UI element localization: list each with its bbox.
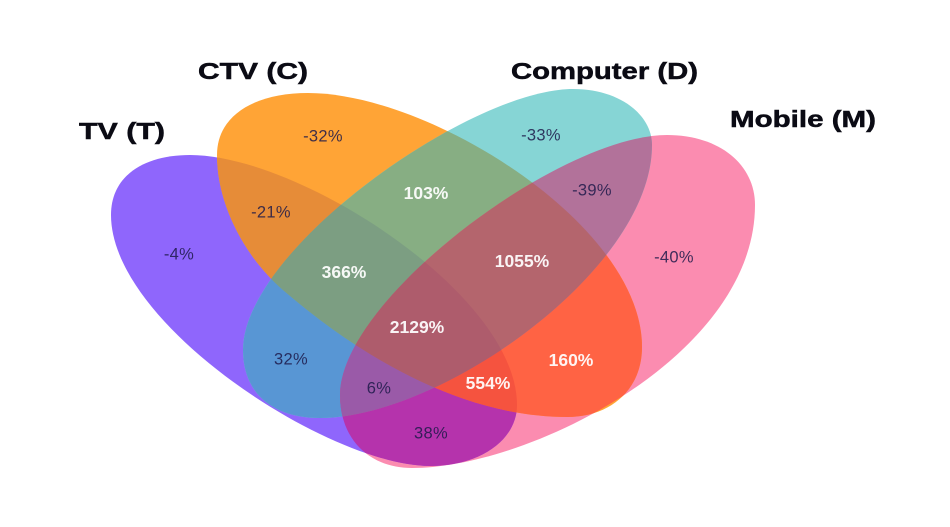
value: CTV, Computer and Mobile: 1055% <box>495 251 550 271</box>
value: CTV and Mobile: 160% <box>549 350 594 370</box>
venn diagram <box>79 62 875 468</box>
value: CTV only: -32% <box>303 128 343 146</box>
set: Mobile <box>340 135 755 468</box>
value: TV and CTV: -21% <box>251 204 291 222</box>
overlap: all four <box>356 262 501 388</box>
value: Computer and Mobile: -39% <box>572 182 612 200</box>
overlap: CTV and Computer <box>272 131 532 345</box>
value: all four: 2129% <box>390 317 445 337</box>
set: Computer <box>243 89 652 418</box>
panel: overlapping sets <box>111 89 755 468</box>
heading: Computer: Computer (D) <box>511 58 698 84</box>
overlap: TV and Mobile <box>340 345 516 466</box>
overlap: CTV and Mobile <box>426 182 642 417</box>
value: TV and Computer: 32% <box>274 350 308 368</box>
overlap: TV and CTV <box>217 158 341 279</box>
overlap: CTV, Computer and Mobile <box>356 182 606 388</box>
heading: CTV: CTV (C) <box>198 58 308 84</box>
value: TV only: -4% <box>164 246 194 264</box>
value: TV, CTV and Computer: 366% <box>322 262 367 282</box>
overlap: TV, CTV and Mobile <box>356 262 517 412</box>
set: CTV <box>217 93 642 417</box>
heading: TV: TV (T) <box>79 118 165 144</box>
overlap: Computer and Mobile <box>340 136 652 416</box>
overlap: TV, Computer and Mobile <box>340 264 501 416</box>
value: Computer only: -33% <box>521 126 561 144</box>
value: TV, Computer and Mobile: 6% <box>367 380 391 398</box>
value: TV, CTV and Mobile: 554% <box>466 373 511 393</box>
heading: Mobile: Mobile (M) <box>730 106 876 132</box>
value: CTV and Computer: 103% <box>404 183 449 203</box>
overlap: TV and Computer <box>243 204 356 418</box>
set: TV <box>111 155 517 466</box>
value: TV and Mobile: 38% <box>414 424 448 442</box>
value: Mobile only: -40% <box>654 248 694 266</box>
overlap: TV, CTV and Computer <box>271 204 424 345</box>
